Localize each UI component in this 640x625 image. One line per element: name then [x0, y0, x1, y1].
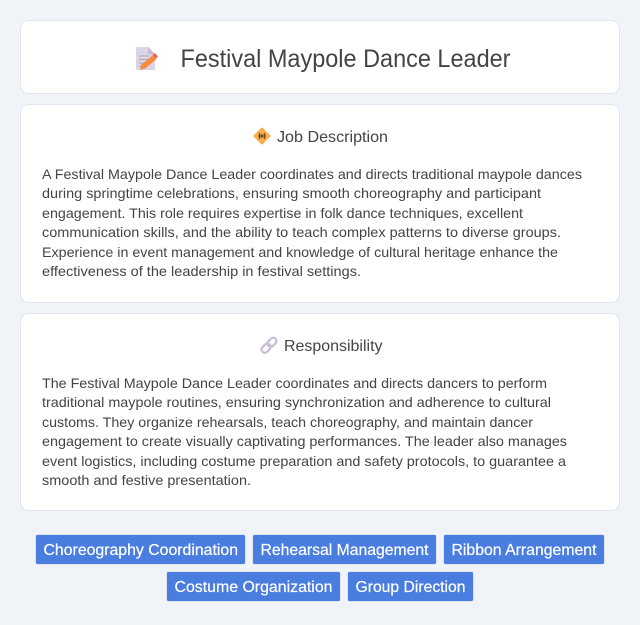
icon: document with pencil [136, 47, 158, 70]
text block: job description: communication skills, and the ability to teach complex patterns to diverse groups. [42, 224, 561, 240]
title: Festival Maypole Dance Leader [180, 45, 510, 73]
tag: group direction: Group Direction [356, 579, 466, 596]
tag: group direction [348, 572, 474, 602]
tag: costume organization [166, 572, 340, 602]
tag: costume organization: Costume Organization [174, 579, 332, 596]
text block: job description: during springtime celebrations, ensuring smooth choreography and participant [42, 185, 541, 201]
panel: responsibility [20, 314, 620, 510]
tag: rehearsal management: Rehearsal Management [260, 542, 429, 559]
text block: job description: Experience in event management and knowledge of cultural heritage enhance the [42, 244, 558, 260]
tag list [36, 534, 604, 602]
tag: choreography coordination [36, 534, 246, 564]
heading: job description: Job Description [277, 129, 388, 146]
text block: responsibility: The Festival Maypole Dance Leader coordinates and directs dancers to perform [42, 375, 547, 391]
text block: job description: engagement. This role requires expertise in folk dance techniques, excellent [42, 205, 523, 221]
text block: responsibility: event logistics, including costume preparation and safety protocols, to guarantee a [42, 453, 566, 469]
text block: responsibility: engagement to create visually captivating performances. The leader also manages [42, 433, 567, 449]
tag: rehearsal management [252, 534, 436, 564]
tag: ribbon arrangement: Ribbon Arrangement [452, 542, 597, 559]
text block: responsibility [42, 375, 567, 488]
icon: chain link [260, 336, 278, 354]
panel: job description [20, 104, 620, 302]
heading: responsibility: Responsibility [284, 338, 382, 355]
text block: job description: A Festival Maypole Dance Leader coordinates and directs traditional maypole dances [42, 166, 582, 182]
text block: responsibility: customs. They organize rehearsals, teach choreography, and maintain dancer [42, 414, 533, 430]
tag: ribbon arrangement [444, 534, 604, 564]
text block: responsibility: smooth and festive presentation. [42, 472, 251, 488]
panel: title header [20, 20, 620, 94]
icon: orange diamond sign [254, 128, 270, 144]
text block: responsibility: traditional maypole routines, ensuring synchronization and adherence to cultural [42, 394, 551, 410]
text block: job description: effectiveness of the leadership in festival settings. [42, 263, 361, 279]
text block: job description [42, 166, 582, 279]
tag: choreography coordination: Choreography Coordination [44, 542, 238, 559]
